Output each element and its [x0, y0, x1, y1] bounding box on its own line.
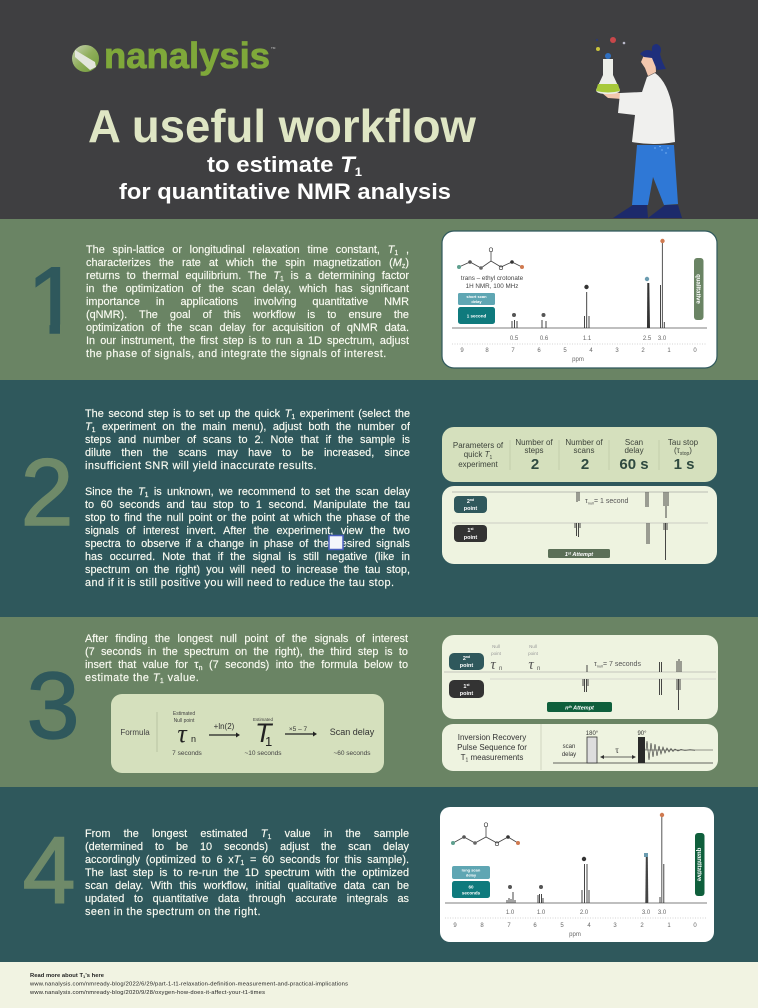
ppm axis: 2 [640, 923, 644, 929]
parameter labels: Parameters of [453, 441, 504, 450]
scan delay term [330, 727, 375, 757]
compound label: 1H NMR, 100 MHz [466, 283, 518, 290]
integrals: 3.0 [642, 910, 651, 916]
attempt label: st [568, 552, 572, 556]
null point markers: τ [528, 657, 534, 673]
section 1 band [0, 219, 758, 380]
subtitle: to estimate T [207, 152, 354, 177]
panel: quantitative spectrum [440, 807, 714, 942]
ppm axis: ppm [572, 357, 584, 363]
null point term [172, 711, 203, 757]
pulse sequence label: measurements [468, 753, 523, 762]
parameter labels: ) [689, 446, 692, 455]
qualitative tag: qualitative [694, 274, 700, 304]
pulse sequence label [457, 733, 527, 764]
text block: step 1: characterizes the rate at which the spin magnetization (Mz) [86, 257, 409, 270]
point pills: 1 [467, 528, 470, 534]
point pills: 2 [467, 499, 470, 505]
subtitle [119, 152, 451, 204]
text block: step 4: From the longest estimated T1 value in the sample [85, 828, 409, 841]
ppm axis [452, 344, 706, 363]
tau null label: = 7 seconds [603, 661, 641, 668]
section 3 band [0, 617, 758, 787]
parameter labels: quick T [464, 450, 490, 459]
parameter labels: delay [624, 446, 644, 455]
tau null label: τ [594, 661, 597, 668]
text block: step 2: signals of interest invert. After the experiment, view the two [85, 525, 410, 537]
null point markers: τ [490, 657, 496, 673]
scan delay tag: delay [471, 299, 482, 304]
ppm axis: 5 [563, 348, 567, 354]
ppm axis: 7 [511, 348, 515, 354]
point pills: point [460, 663, 473, 669]
ppm axis: 4 [587, 923, 591, 929]
pulse diagram: delay [562, 752, 576, 758]
footer links: www.nanalysis.com/nmready-blog/2022/6/29/part-1-t1-relaxation-definition-measurement-and-practical-implications [29, 982, 348, 988]
ppm axis: ppm [569, 932, 581, 938]
footer links: www.nanalysis.com/nmready-blog/2020/9/28/oxygen-how-does-it-affect-your-t1-times [29, 990, 265, 996]
point pills: point [464, 535, 477, 541]
ppm axis [445, 918, 706, 938]
pulse diagram: scan [563, 744, 575, 750]
compound label [461, 275, 524, 290]
point pills: nd [470, 498, 474, 502]
parameter labels: Number of [515, 438, 553, 447]
text block: step 4 [85, 828, 409, 921]
molecule: trans-ethyl crotonate [457, 248, 524, 272]
T1 term: 1 [265, 734, 272, 749]
integrals: 2.5 [643, 336, 652, 342]
ppm axis: 7 [507, 923, 511, 929]
ppm axis: 6 [533, 923, 537, 929]
tau null label: = 1 second [594, 498, 629, 505]
parameter values: 60 s [619, 456, 649, 473]
text block: step 4: (determined to be 10 seconds) adjust the scan delay [85, 841, 409, 853]
ppm axis: 9 [453, 923, 457, 929]
integrals: 0.6 [540, 336, 549, 342]
footer band [0, 962, 758, 1008]
text block: step 2: has occurred. Note that if the signal is still negative (like in [85, 551, 410, 563]
text block: step 4: The last step is to re-run the 1D spectrum with the optimized [85, 867, 409, 879]
integrals: 3.0 [658, 910, 667, 916]
pulse diagram [553, 731, 713, 763]
subtitle: for quantitative NMR analysis [119, 179, 451, 204]
text block: step 1 [86, 244, 409, 362]
scan delay tag [458, 293, 495, 324]
icon: checkbox artifact [329, 536, 343, 550]
footer links: 's here [85, 973, 105, 979]
attempt label: th [568, 705, 572, 709]
attempt label: Attempt [572, 706, 595, 712]
logo: nanalysis: TM [271, 46, 276, 50]
panel: formula [111, 694, 384, 773]
text block: step 2: spectra to observe if a change in phase of the desired signals [85, 538, 410, 550]
molecule: O [495, 842, 500, 848]
ppm axis: 8 [485, 348, 489, 354]
molecule: trans-ethyl crotonate: O [499, 266, 504, 272]
tau null label: τ [585, 498, 588, 505]
ppm axis: 1 [667, 348, 671, 354]
section 2 band [0, 380, 758, 617]
parameter labels: scans [574, 446, 594, 455]
scan delay term: Scan delay [330, 727, 375, 737]
text block: step 1: The spin-lattice or longitudinal relaxation time constant, T1 , [86, 244, 409, 257]
null point markers: point [491, 651, 502, 656]
parameter labels: Scan [625, 438, 643, 447]
text block: step 2: to 60 seconds and tau stop to 1 second. Manipulate the tau [85, 499, 410, 511]
null point term: n [191, 734, 196, 744]
parameter labels: Number of [565, 438, 603, 447]
arrow: +ln(2) [209, 722, 240, 738]
molecule: O [484, 823, 489, 829]
scan delay tag: delay [466, 872, 477, 878]
number 4: 4 [23, 818, 75, 924]
pulse diagram: 90° [637, 731, 647, 737]
integrals: 0.5 [510, 336, 519, 342]
parameter labels: stop [680, 451, 690, 457]
pulse diagram: τ [615, 745, 619, 755]
text block: step 2: The second step is to set up the quick T1 experiment (select the [85, 408, 410, 421]
molecule: trans-ethyl crotonate: O [489, 248, 494, 254]
null point markers: point [528, 651, 539, 656]
text block: step 1: optimization of the scan delay for acquisition of qNMR data. [86, 322, 409, 334]
arrow: +ln(2): +ln(2) [214, 722, 235, 731]
pulse diagram: 180° [586, 731, 599, 737]
quantitative tag: quantitative [696, 848, 702, 882]
text block: step 3: (7 seconds in the spectrum on the right), the third step is to [85, 646, 408, 658]
null point markers: n [537, 666, 540, 672]
ppm axis: 5 [560, 923, 564, 929]
pulse sequence label: Inversion Recovery [458, 733, 526, 742]
text block: step 2: and if it is still positive you will need to reduce the tau stop. [85, 577, 394, 589]
parameter labels [453, 438, 699, 469]
formula label: Formula [120, 728, 150, 737]
number 3: 3 [27, 653, 79, 759]
section 4 band [0, 787, 758, 962]
footer links [29, 973, 348, 996]
null point markers: n [499, 666, 502, 672]
panel: nth attempt spectra [442, 635, 718, 719]
text block: step 1: the phase of signals, and integrate the signals of interest. [86, 348, 387, 360]
ppm axis: 3 [613, 923, 617, 929]
text block: step 4: seen in the spectrum on the right. [85, 906, 261, 918]
scan delay tag: long scan [462, 868, 481, 872]
text block: step 2: dilute then the scans may have to be increased, since [85, 447, 410, 459]
parameter values: 2 [581, 456, 589, 473]
ppm axis: 0 [693, 923, 697, 929]
pulse sequence label: 1 [465, 758, 468, 764]
text block: step 4: updated to quantitative data through accurate integrals as [85, 893, 409, 905]
spectra [452, 492, 708, 560]
arrow: x5-7 [285, 726, 317, 736]
text block: step 1: importance in applications involving quantitative NMR [86, 296, 409, 308]
scan delay tag: short scan [466, 294, 487, 299]
spectra [444, 659, 716, 710]
footer links: Read more about T [30, 973, 83, 979]
spectrum peaks [445, 813, 707, 903]
number 2: 2 [21, 440, 73, 546]
point pills: point [464, 506, 477, 512]
attempt label: n [565, 706, 568, 712]
text block: step 2: steps and number of scans to 2. Note that if the sample is [85, 434, 410, 446]
parameter values: 1 s [674, 456, 694, 473]
text block: step 3: estimate the T1 value. [85, 672, 199, 685]
footer links: 1 [83, 974, 86, 979]
integrals [510, 336, 667, 342]
integrals: 1.1 [583, 336, 592, 342]
text block: step 2: stop to find the null point or the point at which the phase of the [85, 512, 410, 524]
null point term: 7 seconds [172, 750, 203, 757]
integrals: 2.0 [580, 910, 589, 916]
ppm axis: 9 [460, 348, 464, 354]
text block: step 2: T1 experiment on the main menu), adjust both the number of [85, 421, 410, 434]
integrals [506, 910, 667, 916]
pulse sequence label: T [461, 753, 465, 762]
attempt label: 1 [565, 552, 568, 558]
molecule [451, 823, 520, 848]
qualitative tag [694, 258, 704, 320]
integrals: 1.0 [537, 910, 546, 916]
null point markers: Null [529, 644, 537, 649]
parameter labels: 1 [490, 455, 493, 461]
header band [0, 0, 758, 219]
ppm axis: 0 [693, 348, 697, 354]
point pills: point [460, 691, 473, 697]
point pills: nd [466, 655, 470, 659]
number 1: 1 [27, 248, 80, 354]
null point term: Null point [174, 718, 195, 724]
text block: step 1: (qNMR). The goal of this workflow is to ensure the [86, 309, 409, 321]
panel: parameters of quick T1 experiment [442, 427, 717, 482]
scan delay tag: 1 second [467, 314, 487, 318]
parameter labels: experiment [458, 460, 499, 469]
ppm axis: 2 [641, 348, 645, 354]
arrow: x5-7: ×5 – 7 [289, 726, 308, 733]
T1 term: Estimated [253, 717, 273, 722]
text block: step 1: returns to thermal equilibrium. The T1 is a determining factor [86, 270, 409, 283]
scan delay tag: seconds [462, 890, 481, 896]
text block: step 2 [85, 408, 410, 593]
ppm axis: 3 [615, 348, 619, 354]
point pills: 1 [463, 684, 466, 690]
null point markers: Null [492, 644, 500, 649]
text block: step 1: In our instrument, the first step is to run a 1D spectrum, adjust [86, 335, 409, 347]
null point markers [490, 644, 540, 673]
panel: qualitative spectrum [442, 231, 717, 368]
point pills [454, 496, 487, 542]
null point term: τ [177, 719, 188, 748]
point pills [449, 653, 484, 698]
parameter values [531, 456, 694, 473]
scan delay term: ~60 seconds [333, 750, 371, 757]
parameter labels: Tau stop [668, 438, 699, 447]
point pills: st [470, 527, 474, 531]
attempt label: Attempt [571, 552, 594, 558]
text block: step 3 [85, 633, 408, 687]
T1 term: ~10 seconds [244, 750, 282, 757]
logo: nanalysis: nanalysis [104, 35, 270, 76]
title: A useful workflow [88, 100, 476, 152]
icon: floating molecules [596, 37, 625, 51]
T1 term: T [255, 718, 274, 748]
tau null label: null [597, 664, 603, 668]
text block: step 1: in the optimization of the scan delay, which has significant [86, 283, 409, 295]
T1 term [244, 717, 282, 757]
ppm axis: 6 [537, 348, 541, 354]
parameter labels: steps [524, 446, 544, 455]
compound label: trans – ethyl crotonate [461, 275, 524, 282]
point pills: 2 [463, 656, 466, 662]
quantitative tag [695, 833, 704, 896]
tau null label: null [588, 500, 594, 506]
panel: 1st attempt spectra [442, 486, 717, 564]
parameter labels: (τ [674, 446, 680, 455]
text block: step 2: insufficient SNR will yield inaccurate results. [85, 460, 317, 472]
illustration: scientist with flask [596, 37, 682, 218]
attempt label [547, 702, 612, 712]
text block: step 2: Since the T1 is unknown, we recommend to set the scan delay [85, 486, 410, 499]
pulse sequence label: Pulse Sequence for [457, 743, 527, 752]
null point term: Estimated [173, 711, 195, 717]
ppm axis: 4 [589, 348, 593, 354]
ppm axis: 1 [667, 923, 671, 929]
integrals: 3.0 [658, 336, 667, 342]
text block: step 3: insert that value for τn (7 seconds) into the formula below to [85, 659, 408, 672]
parameter values: 2 [531, 456, 539, 473]
text block: step 4: accordingly (optimized to 6 xT1 = 60 seconds for this sample). [85, 854, 409, 867]
scan delay tag: 60 [468, 884, 474, 890]
scan delay tag [452, 866, 490, 898]
text block: step 4: scan delay. With this workflow, initial qualitative data can be [85, 880, 409, 892]
text block: step 2: spectrum on the right) you will need to increase the tau stop, [85, 564, 410, 576]
ppm axis: 8 [480, 923, 484, 929]
text block: step 3: After finding the longest null point of the signals of interest [85, 633, 408, 645]
panel: inversion recovery pulse sequence [442, 724, 718, 771]
subtitle: 1 [355, 165, 362, 179]
point pills: st [466, 683, 470, 687]
spectrum peaks [452, 239, 707, 328]
integrals: 1.0 [506, 910, 515, 916]
attempt label [548, 549, 610, 558]
